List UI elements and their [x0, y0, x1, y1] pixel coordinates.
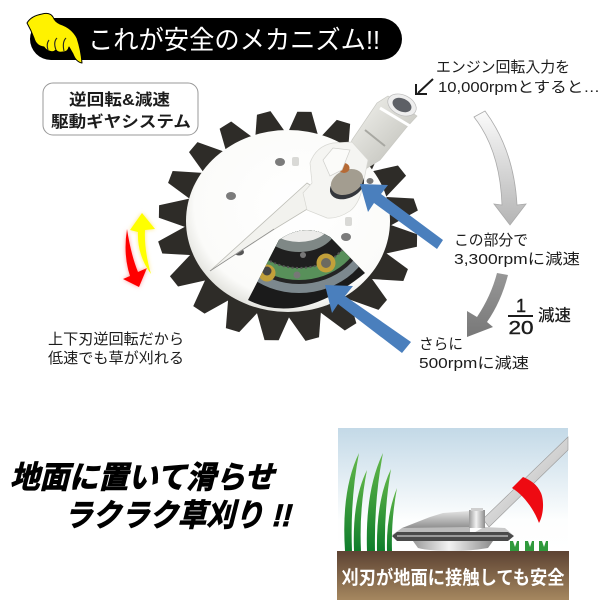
drive shaft housing: [346, 90, 420, 170]
toothed lower blade: [156, 109, 420, 343]
gray curved arrow: top: [474, 111, 526, 225]
banner pill: [30, 18, 402, 60]
banner title: これが安全のメカニズム!!: [88, 25, 380, 55]
note: counter rotation: 低速でも草が刈れる: [48, 350, 184, 367]
panel: ground contact illustration: [337, 428, 569, 600]
slogan: 地面に置いて滑らせ: [8, 460, 281, 495]
blue arrow: first reduction: [360, 184, 443, 249]
fraction label: 1/20 reduction: 1: [516, 296, 526, 316]
gray curved arrow: bottom: [467, 273, 508, 337]
central hub: [303, 142, 368, 218]
fraction label: 1/20 reduction: 減速: [538, 306, 571, 325]
gear cutaway: [248, 230, 365, 308]
note: 3,300rpm: この部分で: [454, 232, 528, 249]
blade mechanism illustration: [156, 90, 420, 343]
note: 500rpm: [419, 336, 529, 372]
trimmer shaft: [483, 437, 568, 527]
icon: yellow pointing hand: [27, 13, 82, 63]
label: gear system: [43, 83, 198, 135]
slogan: [8, 460, 297, 533]
input speed note: エンジン回転入力を: [436, 59, 570, 76]
sky: [338, 428, 568, 551]
note: counter rotation: 上下刃逆回転だから: [48, 331, 184, 348]
input speed note: [416, 59, 600, 96]
note: 3,300rpm: [454, 232, 580, 268]
note: 3,300rpm: 3,300rpmに減速: [454, 251, 580, 268]
note: 500rpm: さらに: [419, 336, 463, 353]
header banner: [27, 13, 402, 63]
fraction label: 1/20 reduction: 20: [508, 318, 534, 338]
note: 500rpm: 500rpmに減速: [419, 355, 529, 372]
white cross blade: [210, 183, 318, 271]
input speed note: 10,000rpmとすると…: [438, 79, 600, 96]
cutter head: [392, 508, 514, 551]
yellow up arrow: [130, 213, 155, 274]
black arrow: [416, 79, 433, 94]
disc bolts and dots: [226, 157, 374, 256]
fraction label: 1/20 reduction: [508, 296, 571, 338]
tall grass: [344, 453, 397, 551]
short cut grass: [510, 541, 548, 551]
red down arrow: [123, 229, 147, 287]
white upper disc: [186, 130, 390, 312]
rotation arrows: [123, 213, 155, 287]
note: counter rotation: [48, 331, 184, 367]
soil band: [337, 551, 569, 600]
label: gear system: 逆回転&減速: [69, 91, 170, 109]
slogan: ラクラク草刈り !!: [62, 498, 297, 533]
label: gear system: 駆動ギヤシステム: [51, 113, 191, 131]
red guard flag: [512, 477, 543, 523]
blue arrow: second reduction: [325, 285, 411, 353]
caption: 刈刃が地面に接触しても安全: [342, 566, 564, 589]
